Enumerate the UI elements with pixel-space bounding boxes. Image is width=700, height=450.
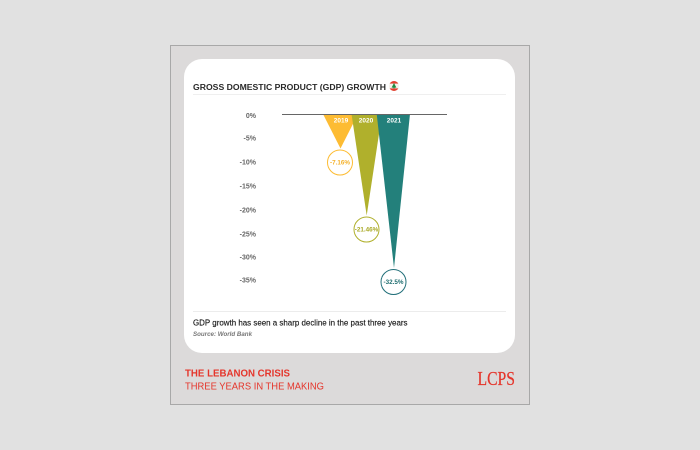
bar: 2020	[352, 114, 382, 216]
callout: 2020 value	[354, 217, 379, 242]
y axis labels: -10%	[240, 160, 257, 166]
takeaway text: GDP growth has seen a sharp decline in the past three years	[193, 318, 408, 328]
bar: 2021	[377, 114, 410, 268]
callout: 2019 value	[328, 150, 352, 175]
footer title: THE LEBANON CRISIS	[185, 368, 290, 380]
logo: LCPS	[478, 368, 515, 390]
bar labels	[334, 118, 402, 124]
y axis labels: -35%	[240, 278, 257, 284]
panel: outer frame	[170, 46, 530, 404]
bar: 2019	[323, 114, 358, 148]
triangle chart	[282, 114, 447, 268]
icon: Lebanon flag	[389, 81, 399, 91]
y axis labels: -15%	[240, 184, 257, 190]
y axis labels: -20%	[240, 208, 257, 214]
callout: 2020 value: -21.46%	[355, 227, 379, 234]
bar labels: 2020	[359, 118, 374, 124]
heading: GROSS DOMESTIC PRODUCT (GDP) GROWTH	[193, 82, 386, 92]
callout: 2021 value: -32.5%	[384, 279, 404, 286]
baseline	[282, 114, 447, 116]
y axis labels: -30%	[240, 254, 257, 262]
bar labels: 2019	[334, 118, 349, 124]
bar labels: 2021	[387, 118, 402, 124]
callout: 2019 value: -7.16%	[330, 160, 350, 167]
panel: white card	[184, 59, 515, 353]
footer subtitle: THREE YEARS IN THE MAKING	[185, 382, 324, 392]
y axis labels: -5%	[244, 136, 257, 142]
source: Source: World Bank	[193, 331, 253, 338]
callout: 2021 value	[381, 270, 406, 294]
y axis labels: -25%	[240, 232, 257, 238]
y axis labels: 0%	[246, 113, 257, 120]
y axis labels	[240, 113, 257, 284]
